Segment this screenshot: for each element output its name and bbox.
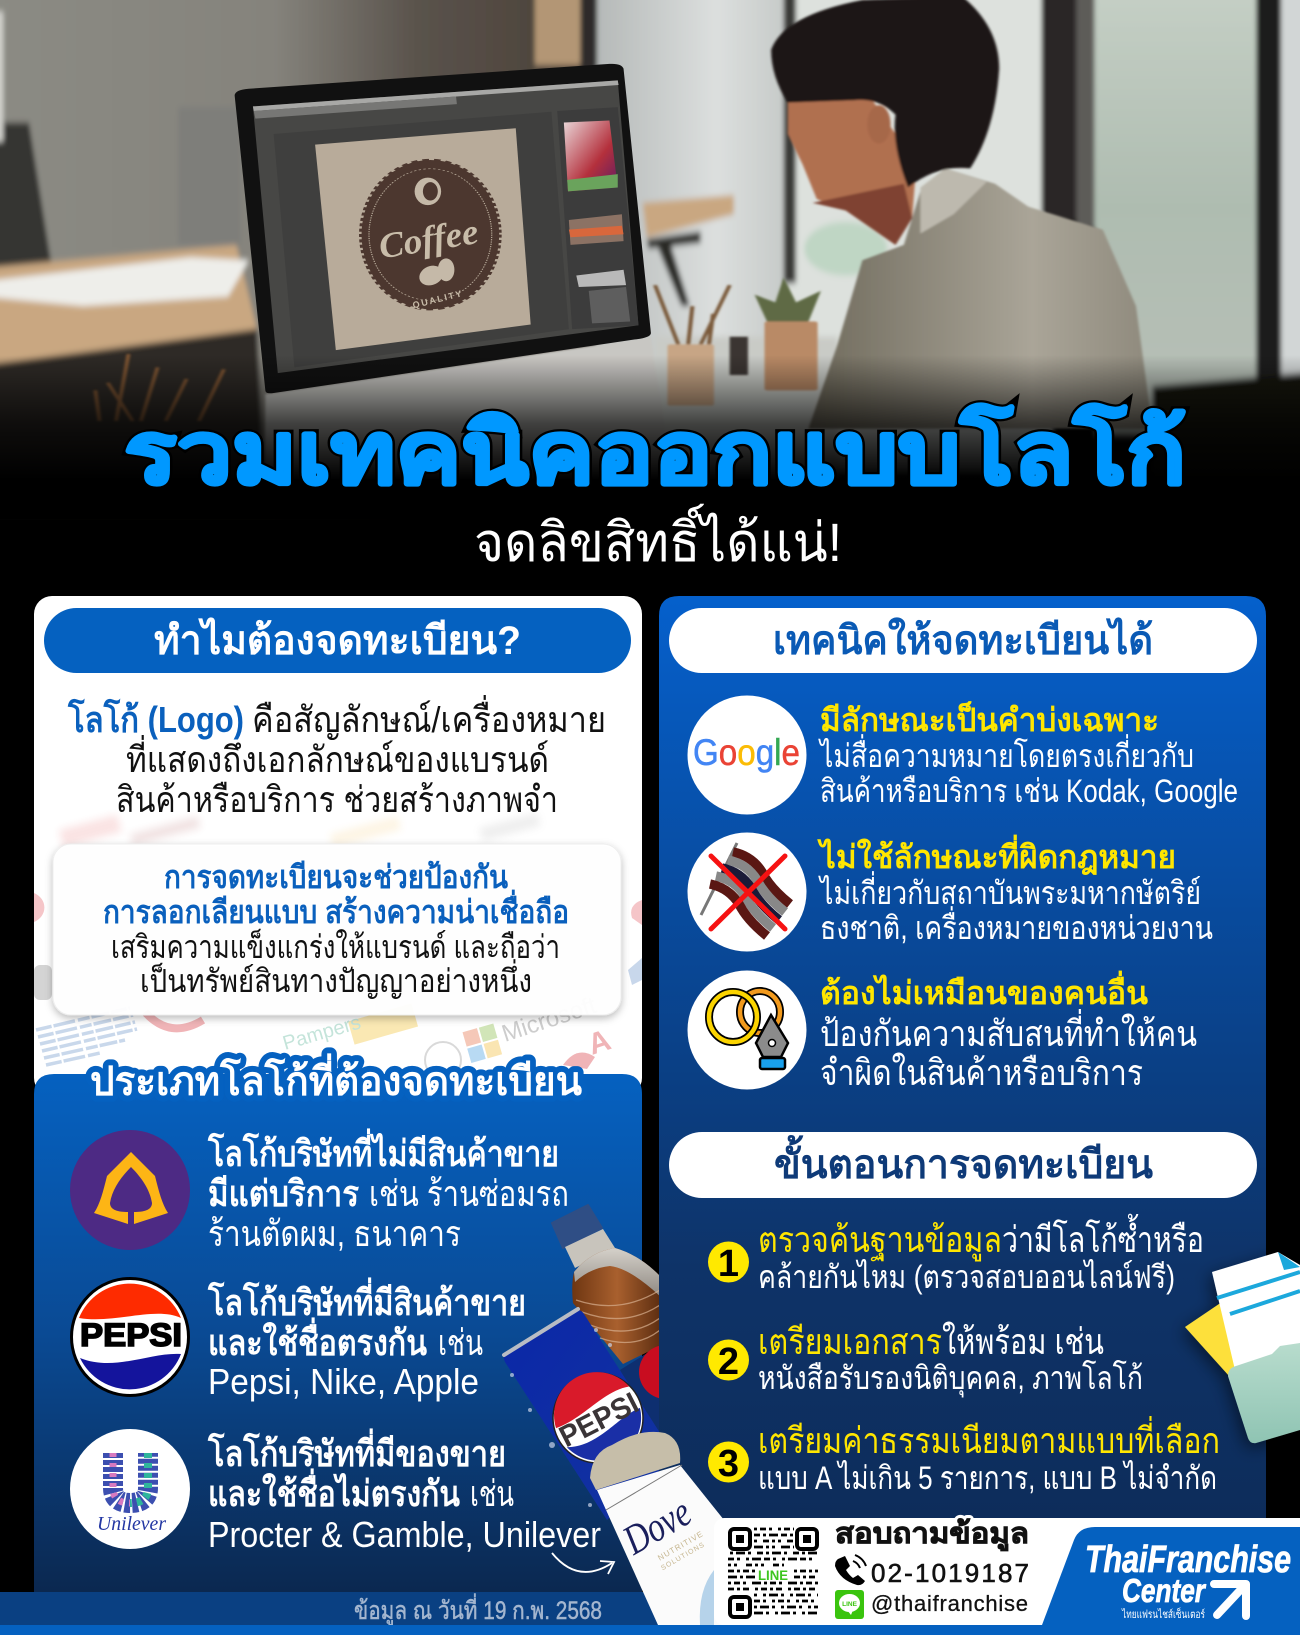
- deodorant bottle: SOLUTIONS: [660, 1541, 706, 1572]
- can: [504, 1309, 660, 1520]
- logo definition text: ที่แสดงถึงเอกลักษณ์ของแบรนด์: [126, 735, 549, 780]
- icon: google: Google: [693, 732, 800, 773]
- bottom date band: [0, 1592, 660, 1625]
- callout: registration benefits: เป็นทรัพย์สินทางปัญญาอย่างหนึ่ง: [140, 959, 532, 999]
- panel: logo types (left blue): [34, 1053, 642, 1592]
- icon: pepsi logo: PEPSI: [80, 1317, 182, 1353]
- item: distinctive: ไม่สื่อความหมายโดยตรงเกี่ยวกับ: [818, 734, 1194, 774]
- item: service company: ร้านตัดผม, ธนาคาร: [208, 1213, 461, 1254]
- item: service company: [70, 1128, 569, 1254]
- number badge 2: [708, 1340, 749, 1383]
- heading pill: [44, 608, 631, 673]
- item: distinctive: มีลักษณะเป็นคำบ่งเฉพาะ: [820, 700, 1159, 738]
- logo definition text: สินค้าหรือบริการ ช่วยสร้างภาพจำ: [116, 779, 558, 820]
- coffee logo on screen: Coffee: [376, 211, 481, 266]
- logo definition text: คือสัญลักษณ์/เครื่องหมาย: [252, 695, 606, 740]
- icon: unilever logo: [70, 1429, 190, 1549]
- step 2: ให้พร้อม เช่น: [942, 1321, 1104, 1362]
- item: not identical: [688, 970, 1197, 1093]
- item: not illegal: ไม่ใช้ลักษณะที่ผิดกฎหมาย: [817, 834, 1176, 875]
- illustration: folder with documents: [1185, 1252, 1300, 1443]
- brand logo panel: Center: [1122, 1572, 1207, 1609]
- qr code: LINE: [758, 1567, 788, 1583]
- callout: registration benefits: การลอกเลียนแบบ สร้างความน่าเชื่อถือ: [103, 889, 569, 930]
- icon: unilever logo: Unilever: [97, 1513, 166, 1535]
- number badge 1: 1: [718, 1243, 739, 1285]
- title: รวมเทคนิคออกแบบโลโก้: [124, 403, 1186, 502]
- faint logo collage background: A: [584, 1024, 615, 1062]
- number badge 2: 2: [718, 1341, 739, 1383]
- step 3: [708, 1416, 1220, 1496]
- item: same name: และใช้ชื่อตรงกัน: [208, 1317, 427, 1363]
- step 2: เตรียมเอกสาร: [758, 1321, 942, 1362]
- step 2: [708, 1321, 1143, 1398]
- item: not identical: ต้องไม่เหมือนของคนอื่น: [820, 970, 1148, 1011]
- step 1: ตรวจค้นฐานข้อมูล: [758, 1219, 1002, 1262]
- number badge 1: [708, 1242, 749, 1285]
- arrow: toward products: [552, 1553, 614, 1574]
- second can: [620, 1346, 659, 1432]
- callout: registration benefits: [53, 844, 621, 1015]
- item: not identical: จำผิดในสินค้าหรือบริการ: [820, 1052, 1143, 1093]
- number badge 3: 3: [718, 1443, 739, 1485]
- pepsi can logo: PEPSI: [554, 1386, 644, 1454]
- panel: techniques (right blue): [659, 596, 1266, 1530]
- contact heading halo: สอบถามข้อมูล: [835, 1518, 1029, 1551]
- callout: registration benefits: การจดทะเบียนจะช่วยป้องกัน: [164, 859, 508, 895]
- heading pill: ทำไมต้องจดทะเบียน?: [154, 617, 521, 663]
- icon: google: [688, 696, 806, 814]
- item: same name: โลโก้บริษัทที่มีสินค้าขาย: [207, 1277, 526, 1323]
- coffee logo on screen: QUALITY: [412, 289, 463, 310]
- person: [771, 0, 1153, 429]
- subtitle: จดลิขสิทธิ์ได้แน่!: [474, 503, 842, 573]
- icon: scb logo: [70, 1130, 190, 1250]
- item: same name: เช่น: [438, 1322, 483, 1363]
- icon: pepsi logo: [72, 1278, 188, 1396]
- icon: crossed flag: [688, 832, 806, 952]
- callout: registration benefits: เสริมความแข็งแกร่งให้แบรนด์ และถือว่า: [111, 928, 560, 965]
- item: different name: โลโก้บริษัทที่มีของขาย: [207, 1428, 506, 1474]
- step 2: หนังสือรับรองนิติบุคคล, ภาพโลโก้: [758, 1360, 1143, 1398]
- panel: why register (left white): [34, 596, 642, 1096]
- contact heading: สอบถามข้อมูล: [835, 1518, 1029, 1551]
- item: service company: เช่น ร้านซ่อมรถ: [369, 1173, 569, 1214]
- bottle: [552, 1205, 662, 1364]
- step 1: [708, 1213, 1204, 1295]
- icon: line: [835, 1590, 864, 1619]
- faint logo collage background: Pampers: [280, 1012, 363, 1055]
- faint logo collage background: [34, 812, 642, 1078]
- logo definition text: [67, 695, 606, 820]
- bottom blue bar: [0, 1625, 1300, 1635]
- line handle: @thaifranchise: [871, 1591, 1028, 1616]
- faint logo collage background: Microsoft: [499, 992, 600, 1048]
- item: distinctive: [688, 696, 1238, 814]
- item: different name: และใช้ชื่อไม่ตรงกัน: [208, 1468, 460, 1514]
- title: รวมเทคนิคออกแบบโลโก้: [124, 403, 1186, 502]
- item: not illegal: ธงชาติ, เครื่องหมายของหน่วยงาน: [820, 906, 1213, 946]
- item: different name: Procter & Gamble, Unilever: [208, 1514, 601, 1555]
- icon: brand arrow: [1214, 1584, 1246, 1616]
- heading: techniques: เทคนิคให้จดทะเบียนได้: [773, 617, 1153, 663]
- icon: rings and pen nib: [688, 970, 806, 1090]
- step 3: เตรียมค่าธรรมเนียมตามแบบที่เลือก: [758, 1416, 1220, 1461]
- hero photo: designer at a monitor: [0, 0, 1300, 519]
- qr code: [728, 1529, 818, 1617]
- item: service company: โลโก้บริษัทที่ไม่มีสินค้าขาย: [207, 1128, 559, 1174]
- deodorant bottle: Dove: [615, 1489, 699, 1565]
- item: same name: [72, 1277, 526, 1402]
- step 1: ว่ามีโลโก้ซ้ำหรือ: [1002, 1213, 1204, 1260]
- item: not identical: ป้องกันความสับสนที่ทำให้คน: [820, 1009, 1197, 1054]
- icon: phone: [835, 1555, 866, 1585]
- footer contact panel: [714, 1518, 1300, 1625]
- brand logo panel: [1042, 1527, 1300, 1625]
- item: same name: Pepsi, Nike, Apple: [208, 1361, 479, 1402]
- brand logo panel: ไทยแฟรนไชส์เซ็นเตอร์: [1121, 1607, 1205, 1621]
- illustration: products bottle can deodorant: [502, 1204, 659, 1520]
- item: service company: มีแต่บริการ: [208, 1173, 360, 1214]
- icon: line: LINE: [842, 1601, 858, 1608]
- item: not illegal: [688, 832, 1213, 952]
- logo definition text: โลโก้ (Logo): [67, 698, 244, 740]
- coffee logo on screen: [362, 160, 499, 310]
- heading: logo types: ประเภทโลโก้ที่ต้องจดทะเบียน: [90, 1053, 582, 1104]
- item: different name: เช่น: [470, 1473, 514, 1514]
- item: different name: [70, 1428, 601, 1555]
- date note: ข้อมูล ณ วันที่ 19 ก.พ. 2568: [354, 1593, 602, 1626]
- deodorant bottle: [590, 1432, 740, 1625]
- number badge 3: [708, 1442, 749, 1485]
- deodorant bottle: NUTRITIVE: [656, 1529, 705, 1563]
- heading: steps: [669, 1132, 1257, 1198]
- heading: techniques: [669, 608, 1257, 673]
- item: not illegal: ไม่เกี่ยวกับสถาบันพระมหากษัตริย์: [817, 871, 1201, 911]
- step 1: คล้ายกันไหม (ตรวจสอบออนไลน์ฟรี): [758, 1259, 1175, 1295]
- phone number: 02-1019187: [871, 1558, 1029, 1588]
- heading: steps: ขั้นตอนการจดทะเบียน: [774, 1135, 1153, 1187]
